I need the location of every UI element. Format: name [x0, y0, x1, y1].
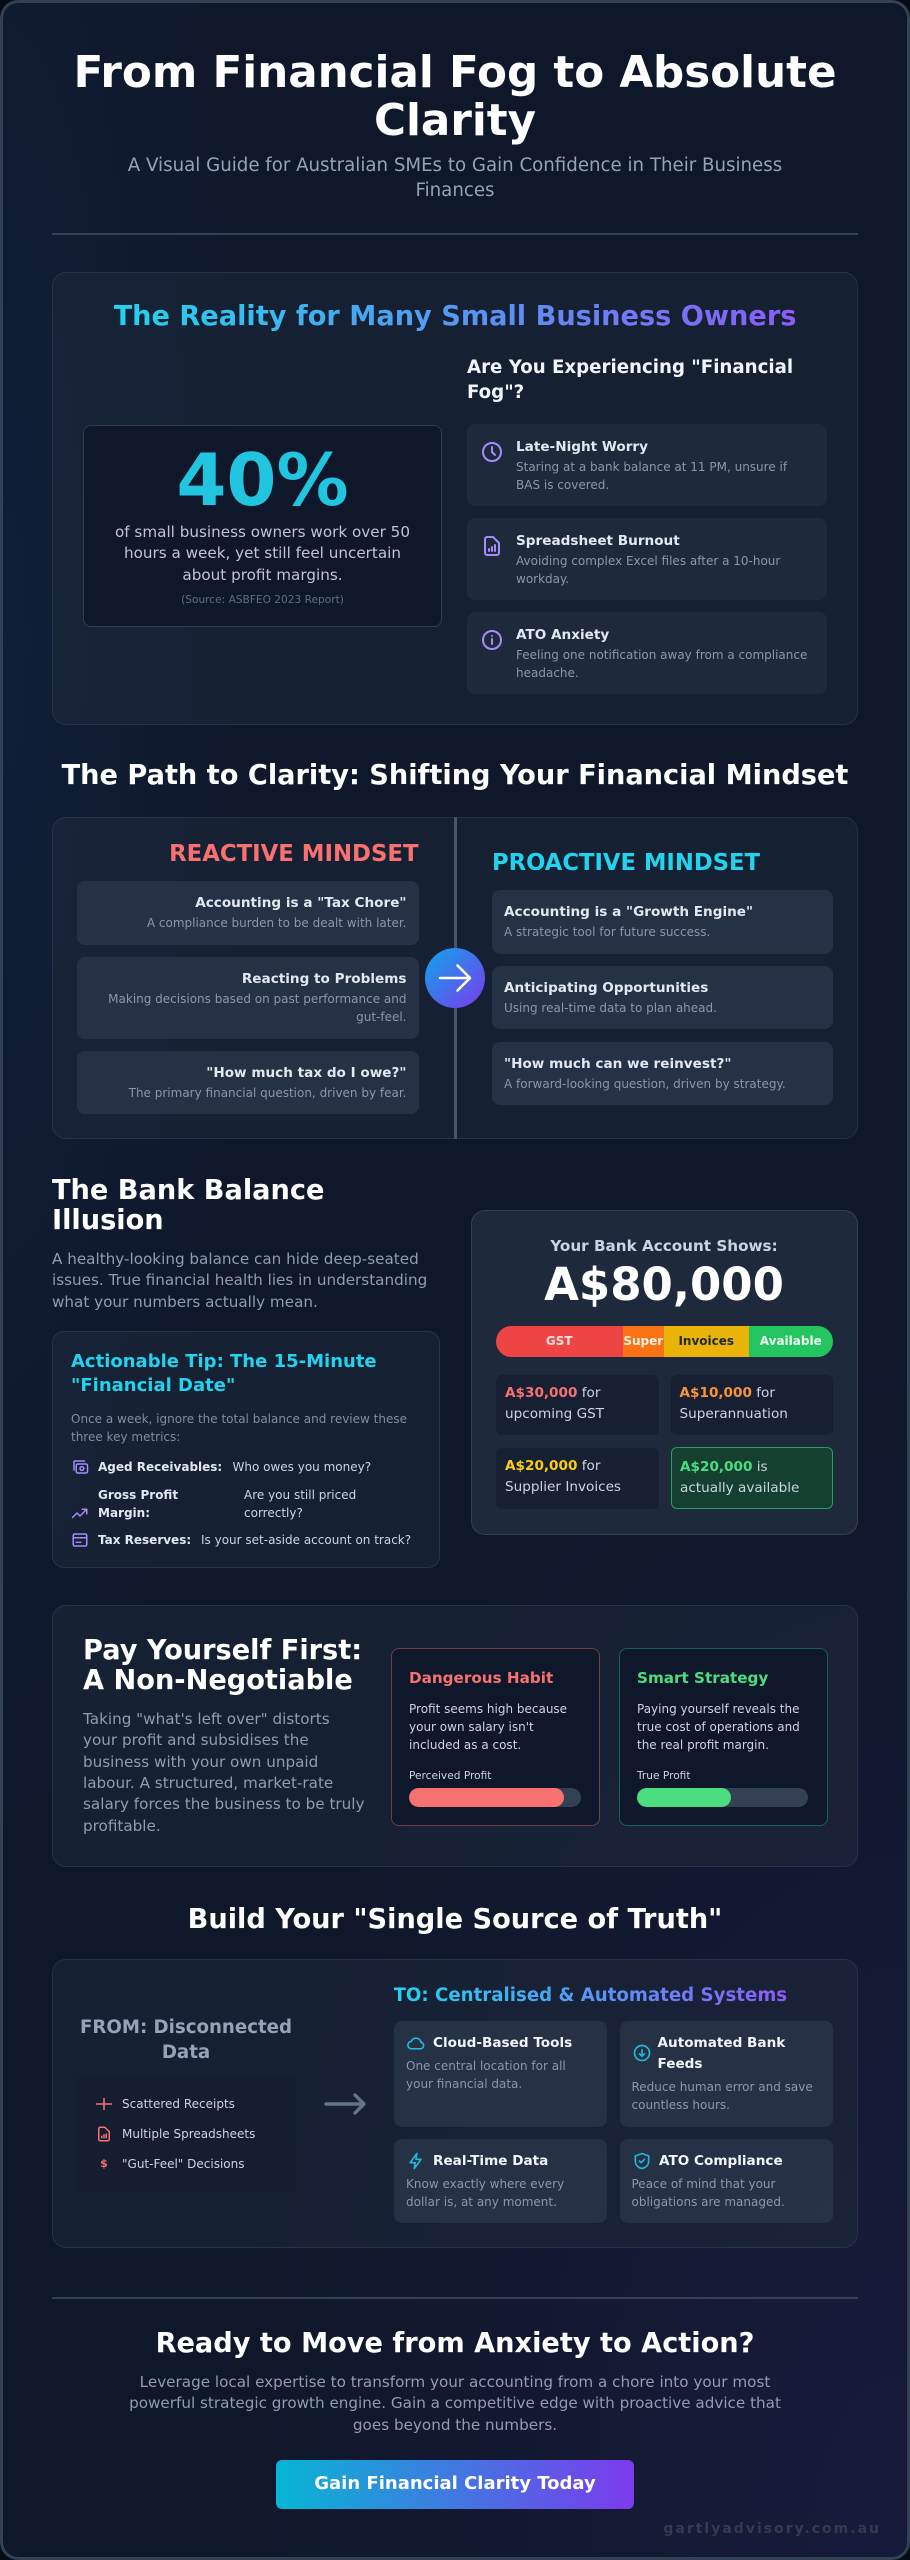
text: bank balance intro: issues. True financial health lies in understanding [52, 1271, 427, 1289]
cta heading: Ready to Move from Anxiety to Action? [156, 2328, 754, 2359]
call to action [0, 2320, 910, 2520]
stat description [115, 523, 410, 584]
icon: document chart [484, 536, 500, 556]
card title [658, 2035, 786, 2072]
metric: tax reserves: Is your set-aside account on track? [201, 1533, 411, 1547]
tip heading [71, 1351, 377, 1396]
card: how much tax: The primary financial question, driven by fear. [129, 1086, 406, 1100]
stacked bar [496, 1326, 833, 1357]
text: pay yourself explanation: business with your own unpaid [83, 1753, 318, 1771]
bar label: Perceived Profit [409, 1770, 491, 1782]
tip description [71, 1412, 407, 1444]
icon: document [98, 2126, 110, 2142]
icon: plus [96, 2098, 112, 2110]
icon: banknotes [73, 1460, 88, 1474]
card text: Peace of mind that your [632, 2177, 775, 2191]
item text: Staring at a bank balance at 11 PM, unsure if [516, 460, 787, 474]
metric: gross profit margin: Gross Profit [98, 1488, 178, 1502]
card text: Profit seems high because [409, 1702, 567, 1716]
item text: headache. [516, 666, 579, 680]
breakdown: super: A$10,000 for [680, 1385, 775, 1401]
card text: your own salary isn't [409, 1720, 534, 1734]
item text: BAS is covered. [516, 478, 609, 492]
tip heading: Actionable Tip: The 15-Minute [71, 1351, 377, 1372]
stat description: about profit margins. [182, 566, 343, 584]
stat description: hours a week, yet still feel uncertain [124, 544, 401, 562]
card title: Real-Time Data [433, 2153, 548, 2169]
arrow: from to [324, 2093, 366, 2115]
text: bank balance intro [52, 1250, 427, 1311]
text: pay yourself explanation: labour. A structured, market-rate [83, 1774, 333, 1792]
tip description: three key metrics: [71, 1430, 180, 1444]
watermark: gartlyadvisory.com.au [663, 2521, 881, 2537]
subtitle: Finances [415, 180, 495, 201]
metric: tax reserves: Tax Reserves: [98, 1533, 191, 1547]
item text: workday. [516, 572, 569, 586]
from heading: Data [162, 2042, 210, 2062]
breakdown: available: A$20,000 is [680, 1459, 768, 1475]
item text [516, 627, 807, 680]
card title: Automated Bank [658, 2035, 785, 2051]
icon: clock [482, 442, 502, 462]
from item: "Gut-Feel" Decisions [122, 2157, 244, 2171]
card text: Know exactly where every [406, 2177, 564, 2191]
icon: arrow circle down [634, 2044, 650, 2062]
item text: Feeling one notification away from a compliance [516, 648, 807, 662]
card: reacting to problems: Making decisions based on past performance and [108, 992, 406, 1006]
card text: One central location for all [406, 2059, 566, 2073]
heading: bank balance illusion: The Bank Balance [52, 1175, 324, 1206]
card title: ATO Compliance [659, 2153, 783, 2169]
header [73, 48, 837, 201]
card: reacting to problems: Reacting to Problems [242, 971, 406, 987]
card title: Cloud-Based Tools [433, 2035, 572, 2051]
metric: gross profit margin [98, 1488, 356, 1520]
card: tax chore: A compliance burden to be dealt with later. [147, 916, 406, 930]
heading: proactive: PROACTIVE MINDSET [492, 850, 760, 876]
bar: true profit [637, 1788, 808, 1807]
stat description: of small business owners work over 50 [115, 523, 410, 541]
from item: Multiple Spreadsheets [122, 2127, 255, 2141]
card: tax chore: Accounting is a "Tax Chore" [195, 895, 406, 911]
card: dangerous habit [390, 1648, 600, 1826]
panel: pay yourself first [52, 1605, 858, 1867]
breakdown: GST [496, 1375, 658, 1435]
breakdown: GST: A$30,000 for [505, 1385, 600, 1401]
cta button [276, 2460, 634, 2509]
item: spreadsheet burnout [467, 518, 827, 600]
heading: pay yourself first: Pay Yourself First: [83, 1635, 362, 1666]
breakdown: invoices: Supplier Invoices [505, 1479, 621, 1495]
card text: obligations are managed. [632, 2195, 785, 2209]
item text: ATO Anxiety [516, 627, 609, 643]
subheading: financial fog: Fog"? [467, 382, 524, 403]
from list [77, 2077, 296, 2192]
breakdown: GST: upcoming GST [505, 1406, 604, 1422]
heading: bank balance illusion: Illusion [52, 1205, 164, 1236]
card: growth engine: A strategic tool for future success. [504, 925, 710, 939]
subtitle [128, 155, 782, 201]
card text [406, 2177, 564, 2209]
card: ATO compliance [620, 2139, 833, 2223]
icon: info [482, 630, 502, 650]
panel: bank account breakdown [471, 1210, 858, 1535]
subheading: financial fog: Are You Experiencing "Financial [467, 357, 793, 378]
card title: Dangerous Habit [409, 1669, 553, 1687]
stat source: (Source: ASBFEO 2023 Report) [181, 594, 344, 606]
stat number: 40% [176, 438, 349, 522]
metric: tax reserves [98, 1533, 411, 1547]
card: how much tax [77, 1051, 418, 1114]
stacked bar: Invoices [678, 1334, 734, 1348]
card: reinvest: A forward-looking question, driven by strategy. [504, 1077, 786, 1091]
text: bank balance intro: what your numbers actually mean. [52, 1293, 318, 1311]
text: bank balance intro: A healthy-looking balance can hide deep-seated [52, 1250, 419, 1268]
text: pay yourself explanation [82, 1710, 364, 1835]
to heading: TO: Centralised & Automated Systems [394, 1985, 787, 2006]
text: pay yourself explanation: your profit and subsidises the [83, 1731, 309, 1749]
heading: pay yourself first: A Non-Negotiable [83, 1665, 353, 1696]
heading: pay yourself first [83, 1635, 362, 1696]
cta text [0, 2372, 910, 2436]
card: anticipating opportunities [492, 966, 833, 1029]
tip heading: "Financial Date" [71, 1375, 235, 1396]
heading: single source of truth: Build Your "Single Source of Truth" [188, 1904, 722, 1935]
text: pay yourself explanation: Taking "what's left over" distorts [83, 1710, 330, 1728]
cta text: powerful strategic growth engine. Gain a competitive edge with proactive advice that [129, 2394, 781, 2412]
heading: reality: The Reality for Many Small Business Owners [114, 301, 796, 332]
card: reinvest [492, 1042, 833, 1105]
breakdown: invoices: A$20,000 for [505, 1458, 600, 1474]
breakdown: invoices [496, 1448, 658, 1509]
card text: Reduce human error and save [632, 2080, 813, 2094]
text: pay yourself explanation: profitable. [83, 1817, 161, 1835]
card text: your financial data. [406, 2077, 522, 2091]
panel: single source of truth [52, 1959, 858, 2248]
card title: Feeds [658, 2056, 702, 2072]
label: bank account shows: Your Bank Account Shows: [550, 1237, 778, 1255]
card: how much tax: "How much tax do I owe?" [206, 1065, 406, 1081]
bar: perceived profit [409, 1788, 581, 1807]
metric: aged receivables: Aged Receivables: [98, 1460, 222, 1474]
cta button: Gain Financial Clarity Today [314, 2473, 596, 2494]
card text [632, 2175, 785, 2211]
icon: dollar: $ [100, 2157, 108, 2170]
subheading: financial fog [467, 357, 793, 403]
card text: the real profit margin. [637, 1738, 769, 1752]
card: bank feeds [620, 2021, 833, 2127]
from heading [80, 2017, 292, 2062]
item text [516, 533, 780, 586]
icon: card [72, 1533, 88, 1547]
cta text: goes beyond the numbers. [353, 2416, 557, 2434]
heading: reactive: REACTIVE MINDSET [169, 841, 418, 867]
panel: actionable tip [52, 1331, 440, 1568]
item: late-night worry [467, 424, 827, 506]
breakdown: available [670, 1447, 833, 1509]
icon: bolt [409, 2152, 422, 2170]
item text [516, 439, 788, 492]
card text [637, 1702, 800, 1752]
heading: bank balance illusion [52, 1175, 324, 1236]
item text: Spreadsheet Burnout [516, 533, 680, 549]
bar label: True Profit [637, 1770, 691, 1782]
panel: mindset comparison [52, 817, 858, 1139]
item: ATO anxiety [467, 612, 827, 694]
balance amount: A$80,000 [544, 1258, 784, 1311]
panel: the reality [52, 272, 858, 725]
from heading: FROM: Disconnected [80, 2017, 292, 2038]
from item: Scattered Receipts [122, 2097, 235, 2111]
tip description: Once a week, ignore the total balance and review these [71, 1412, 407, 1426]
title [73, 48, 837, 146]
card: growth engine [492, 890, 833, 954]
card text [409, 1702, 567, 1752]
card text: Paying yourself reveals the [637, 1702, 800, 1716]
text: pay yourself explanation: salary forces the business to be truly [83, 1795, 364, 1813]
card text: true cost of operations and [637, 1720, 800, 1734]
card: anticipating opportunities: Anticipating Opportunities [504, 980, 708, 996]
stacked bar: Super [623, 1334, 663, 1348]
title: From Financial Fog to Absolute [73, 48, 837, 98]
metric: gross profit margin: correctly? [244, 1506, 303, 1520]
breakdown: super: Superannuation [680, 1406, 788, 1422]
card: tax chore [77, 881, 418, 945]
card text: countless hours. [632, 2098, 730, 2112]
title: Clarity [374, 96, 536, 146]
card title: Smart Strategy [637, 1669, 768, 1687]
card: reacting to problems: gut-feel. [356, 1010, 406, 1024]
cta text: Leverage local expertise to transform your accounting from a chore into your most [140, 2373, 770, 2391]
item text: Avoiding complex Excel files after a 10-hour [516, 554, 780, 568]
breakdown: super [670, 1375, 833, 1435]
card: anticipating opportunities: Using real-time data to plan ahead. [504, 1001, 717, 1015]
arrow: reactive to proactive [425, 948, 485, 1008]
icon: shield check [634, 2152, 650, 2170]
subtitle: A Visual Guide for Australian SMEs to Gain Confidence in Their Business [128, 155, 782, 176]
metric: aged receivables: Who owes you money? [232, 1460, 371, 1474]
item text: Late-Night Worry [516, 439, 648, 455]
card text [406, 2059, 566, 2091]
stacked bar: GST [546, 1334, 573, 1348]
icon: trending up [72, 1508, 88, 1518]
metric: gross profit margin: Margin: [98, 1506, 150, 1520]
stat card: 40 percent [83, 425, 442, 627]
card: cloud tools [394, 2021, 607, 2127]
card text: dollar is, at any moment. [406, 2195, 557, 2209]
metric: aged receivables [98, 1460, 371, 1474]
stacked bar: Available [760, 1334, 822, 1348]
card text [632, 2080, 813, 2112]
card: reacting to problems [77, 957, 418, 1039]
metric: gross profit margin: Are you still priced [244, 1488, 356, 1502]
heading: path to clarity: The Path to Clarity: Shifting Your Financial Mindset [62, 760, 848, 791]
card: real-time data [394, 2139, 607, 2223]
card: growth engine: Accounting is a "Growth Engine" [504, 904, 753, 920]
card: smart strategy [618, 1648, 828, 1826]
card: reinvest: "How much can we reinvest?" [504, 1056, 731, 1072]
breakdown: available: actually available [680, 1480, 799, 1496]
card text: included as a cost. [409, 1738, 521, 1752]
icon: cloud [407, 2037, 424, 2050]
